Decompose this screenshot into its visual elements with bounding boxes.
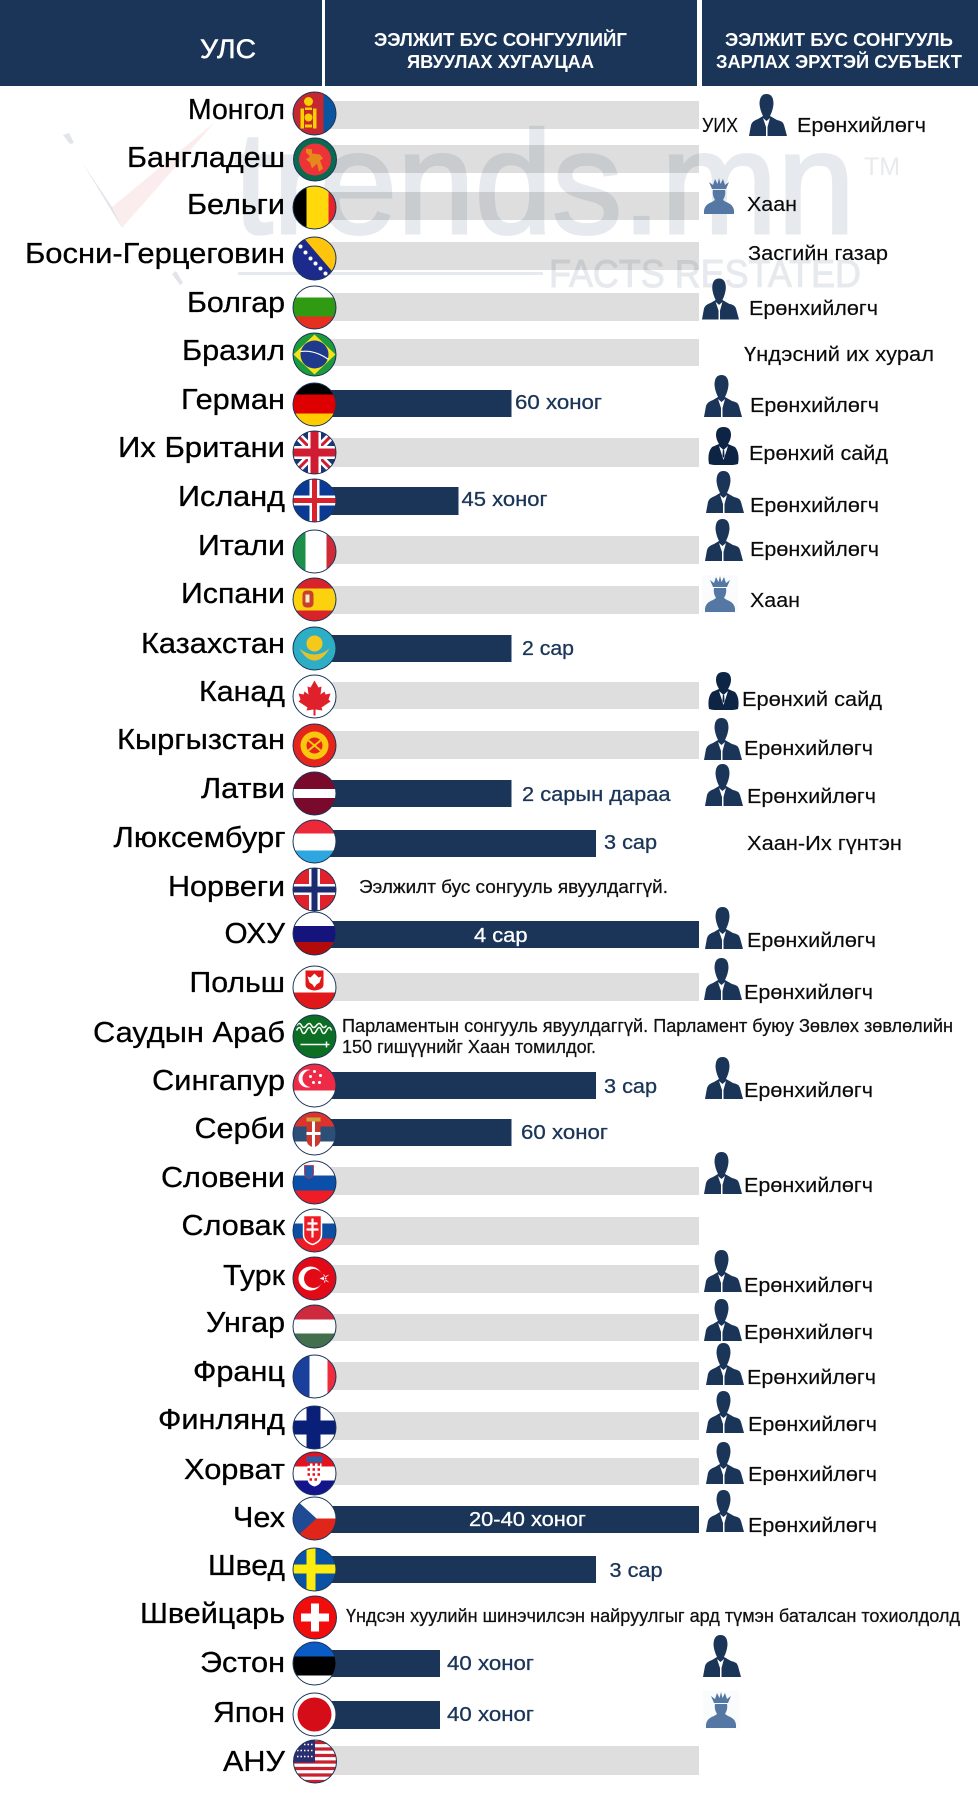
authority label: УИХ <box>702 115 738 137</box>
country label: Саудын Араб <box>93 1017 285 1049</box>
heading: election timing line 2: ЯВУУЛАХ ХУГАУЦАА <box>407 51 594 72</box>
authority name: Ерөнхийлөгч <box>748 1464 877 1486</box>
flag: Hungary <box>292 1304 336 1348</box>
row: Серби <box>194 1112 608 1156</box>
row: Хорват <box>184 1442 877 1496</box>
heading: election timing: ЭЭЛЖИТ БУС СОНГУУЛИЙГ <box>374 29 628 50</box>
country label: Франц <box>193 1356 285 1388</box>
flag: Mongolia <box>292 92 336 136</box>
country label: Бангладеш <box>127 142 285 174</box>
heading: country: УЛС <box>200 34 256 64</box>
authority name: Ерөнхийлөгч <box>744 1322 873 1344</box>
icon: president <box>706 1391 744 1433</box>
timing value: 3 сар <box>604 1075 657 1098</box>
row: Турк <box>223 1250 873 1300</box>
country label: Болгар <box>187 287 285 319</box>
country label: Словени <box>161 1162 285 1194</box>
authority name: Ерөнхийлөгч <box>748 1414 877 1436</box>
row: Япон <box>213 1691 739 1736</box>
row: Босни-Герцеговин <box>25 236 888 280</box>
icon: prime minister <box>708 672 739 710</box>
icon: president <box>704 1152 742 1194</box>
note line 2: 150 гишүүнийг Хаан томилдог. <box>342 1037 596 1057</box>
country label: Кыргызстан <box>117 724 285 756</box>
icon: president <box>705 907 743 949</box>
row: Герман <box>181 375 879 426</box>
timing value: 45 хоног <box>462 488 548 511</box>
flag: Saudi Arabia <box>292 1014 336 1058</box>
authority name: Хаан <box>747 194 797 216</box>
row: Франц <box>193 1343 876 1398</box>
watermark: trends.mn logo: TM <box>864 153 900 181</box>
flag: Luxembourg <box>292 820 336 864</box>
authority name: Ерөнхийлөгч <box>744 1080 873 1102</box>
row: Бельги <box>187 178 797 230</box>
flag: Sweden <box>292 1548 336 1592</box>
flag: Kyrgyzstan <box>292 724 336 768</box>
icon: president <box>749 94 787 136</box>
flag: Turkey <box>292 1256 336 1300</box>
authority name: Ерөнхийлөгч <box>747 930 876 952</box>
header panel <box>0 0 978 86</box>
flag: Singapore <box>292 1064 336 1108</box>
country label: Чех <box>233 1502 286 1534</box>
flag: Belgium <box>292 186 336 230</box>
icon: president <box>702 279 739 319</box>
authority name: Ерөнхий сайд <box>749 443 888 465</box>
flag: Canada <box>292 674 336 718</box>
country label: Эстон <box>200 1647 285 1679</box>
row: Норвеги <box>168 868 668 912</box>
country label: Бразил <box>182 335 285 367</box>
note line 1: Парламентын сонгууль явуулдаггүй. Парламент буюу Зөвлөх зөвлөлийн <box>342 1016 953 1036</box>
country label: Бельги <box>187 189 285 221</box>
country label: Монгол <box>188 94 285 126</box>
authority name: Ерөнхийлөгч <box>749 298 878 320</box>
authority name: Ерөнхийлөгч <box>750 495 879 517</box>
note: Ээлжилт бус сонгууль явуулдаггүй. <box>359 877 668 897</box>
timing value: 40 хоног <box>447 1703 534 1726</box>
icon: king <box>702 575 738 613</box>
country label: Словак <box>182 1210 285 1242</box>
row: Сингапур <box>152 1057 873 1108</box>
authority name: Ерөнхийлөгч <box>744 738 873 760</box>
icon: president <box>705 519 743 561</box>
authority name: Засгийн газар <box>748 243 888 265</box>
authority name: Ерөнхийлөгч <box>747 1367 876 1389</box>
flag: Bosnia <box>292 236 336 280</box>
icon: president <box>705 764 743 806</box>
country label: Итали <box>198 530 285 562</box>
flag: Estonia <box>292 1642 336 1686</box>
timing value: 20-40 хоног <box>469 1508 586 1531</box>
flag: Slovakia <box>292 1208 336 1252</box>
flag: Norway <box>292 868 336 912</box>
icon: president <box>704 718 742 760</box>
row: Бангладеш <box>127 138 337 182</box>
flag: Brazil <box>292 332 336 376</box>
flag: France <box>292 1354 336 1398</box>
authority name: Хаан-Их гүнтэн <box>747 833 902 855</box>
authority name: Ерөнхийлөгч <box>744 1175 873 1197</box>
authority name: Ерөнхийлөгч <box>744 982 873 1004</box>
country label: Турк <box>223 1260 285 1292</box>
flag: Iceland <box>292 478 336 522</box>
flag: Germany <box>292 382 336 426</box>
icon: president <box>706 471 744 513</box>
icon: president <box>704 1299 742 1341</box>
watermark: trends.mn logo: trends.mn <box>234 101 855 264</box>
row: Швед <box>208 1548 662 1592</box>
row: Латви <box>201 764 876 816</box>
timing value: 3 сар <box>610 1559 662 1582</box>
country label: Сингапур <box>152 1065 285 1097</box>
heading: authority: ЭЭЛЖИТ БУС СОНГУУЛЬ <box>725 29 953 50</box>
icon: president <box>704 958 742 1000</box>
country label: Канад <box>199 676 285 708</box>
row: Унгар <box>206 1299 873 1348</box>
timing value: 4 сар <box>474 924 528 947</box>
row: Монгол <box>188 92 926 137</box>
flag: Italy <box>292 530 336 574</box>
icon: president <box>703 1635 741 1677</box>
country label: Финлянд <box>158 1404 285 1436</box>
country label: Серби <box>194 1113 285 1145</box>
flag: Spain <box>292 578 336 622</box>
country label: Норвеги <box>168 871 285 903</box>
flag: Latvia <box>292 772 336 816</box>
row: Эстон <box>200 1635 741 1686</box>
country label: Их Британи <box>118 432 285 464</box>
flag: Japan <box>292 1692 336 1736</box>
row: Швейцарь <box>140 1596 960 1640</box>
watermark: trends.mn logo: FACTS RESTATED <box>549 253 861 296</box>
country label: Швейцарь <box>140 1598 285 1630</box>
timing value: 60 хоног <box>515 391 602 414</box>
icon: emperor <box>703 1691 739 1729</box>
flag: Bangladesh <box>293 138 337 182</box>
row: Польш <box>190 958 873 1010</box>
authority name: Үндэсний их хурал <box>744 344 934 366</box>
timing value: 60 хоног <box>521 1121 608 1144</box>
timing value: 2 сар <box>522 637 574 660</box>
flag: Poland <box>292 966 336 1010</box>
row: Люксембург <box>114 820 902 864</box>
row: Канад <box>199 672 882 718</box>
timing value: 2 сарын дараа <box>522 783 671 806</box>
flag: United States <box>293 1740 337 1784</box>
flag: Russia <box>292 912 336 956</box>
row: Казахстан <box>141 626 574 670</box>
authority name: Ерөнхийлөгч <box>747 786 876 808</box>
authority name: Ерөнхийлөгч <box>748 1515 877 1537</box>
row: Бразил <box>182 332 934 376</box>
country label: АНУ <box>223 1746 286 1778</box>
icon: president <box>706 1442 744 1484</box>
country label: Испани <box>181 578 285 610</box>
heading: authority line 2: ЗАРЛАХ ЭРХТЭЙ СУБЪЕКТ <box>716 51 963 72</box>
country label: Япон <box>213 1697 285 1729</box>
icon: president <box>704 1250 742 1292</box>
timing value: 40 хоног <box>447 1652 534 1675</box>
authority name: Ерөнхийлөгч <box>744 1275 873 1297</box>
country label: Швед <box>208 1550 285 1582</box>
icon: prime minister <box>708 427 739 465</box>
authority name: Ерөнхийлөгч <box>750 395 879 417</box>
country label: Исланд <box>178 481 285 513</box>
country label: Люксембург <box>114 822 286 854</box>
flag: United Kingdom <box>292 430 336 474</box>
flag: Finland <box>292 1406 336 1450</box>
icon: president <box>704 375 742 417</box>
country label: Унгар <box>206 1307 285 1339</box>
country label: Казахстан <box>141 628 285 660</box>
row: Их Британи <box>118 427 888 474</box>
flag: Switzerland <box>293 1596 337 1640</box>
country label: Герман <box>181 384 285 416</box>
row: ОХУ <box>224 907 876 956</box>
row: Исланд <box>178 471 879 522</box>
row: Кыргызстан <box>117 718 873 768</box>
timing value: 3 сар <box>604 831 657 854</box>
row: Болгар <box>187 279 878 330</box>
row: Словени <box>161 1152 873 1204</box>
row: АНУ <box>223 1740 337 1784</box>
flag: Slovenia <box>292 1160 336 1204</box>
authority name: Ерөнхий сайд <box>742 689 882 711</box>
row: Испани <box>181 575 800 622</box>
country label: Хорват <box>184 1454 285 1486</box>
country label: Босни-Герцеговин <box>25 238 285 270</box>
row: Словак <box>182 1208 336 1252</box>
country label: Польш <box>190 967 285 999</box>
note <box>342 1016 953 1057</box>
note: Үндсэн хуулийн шинэчилсэн найруулгыг ард түмэн баталсан тохиолдолд <box>346 1606 960 1626</box>
row: Финлянд <box>158 1391 877 1450</box>
icon: president <box>706 1343 744 1385</box>
flag: Croatia <box>292 1452 336 1496</box>
row: Саудын Араб <box>93 1014 953 1058</box>
country label: Латви <box>201 773 285 805</box>
bar chart: timing bars <box>330 101 699 1775</box>
icon: king <box>704 178 734 214</box>
authority name: Ерөнхийлөгч <box>797 115 926 137</box>
watermark: trends.mn logo <box>63 101 900 296</box>
icon: president <box>706 1490 744 1532</box>
authority name: Хаан <box>750 590 800 612</box>
flag: Serbia <box>292 1112 336 1156</box>
flag: Czechia <box>292 1496 336 1540</box>
authority name: Ерөнхийлөгч <box>750 539 879 561</box>
row: Итали <box>198 519 879 574</box>
flag: Kazakhstan <box>292 626 336 670</box>
flag: Bulgaria <box>292 286 336 330</box>
row: Чех <box>233 1490 877 1540</box>
country label: ОХУ <box>224 918 286 950</box>
icon: president <box>705 1057 743 1099</box>
